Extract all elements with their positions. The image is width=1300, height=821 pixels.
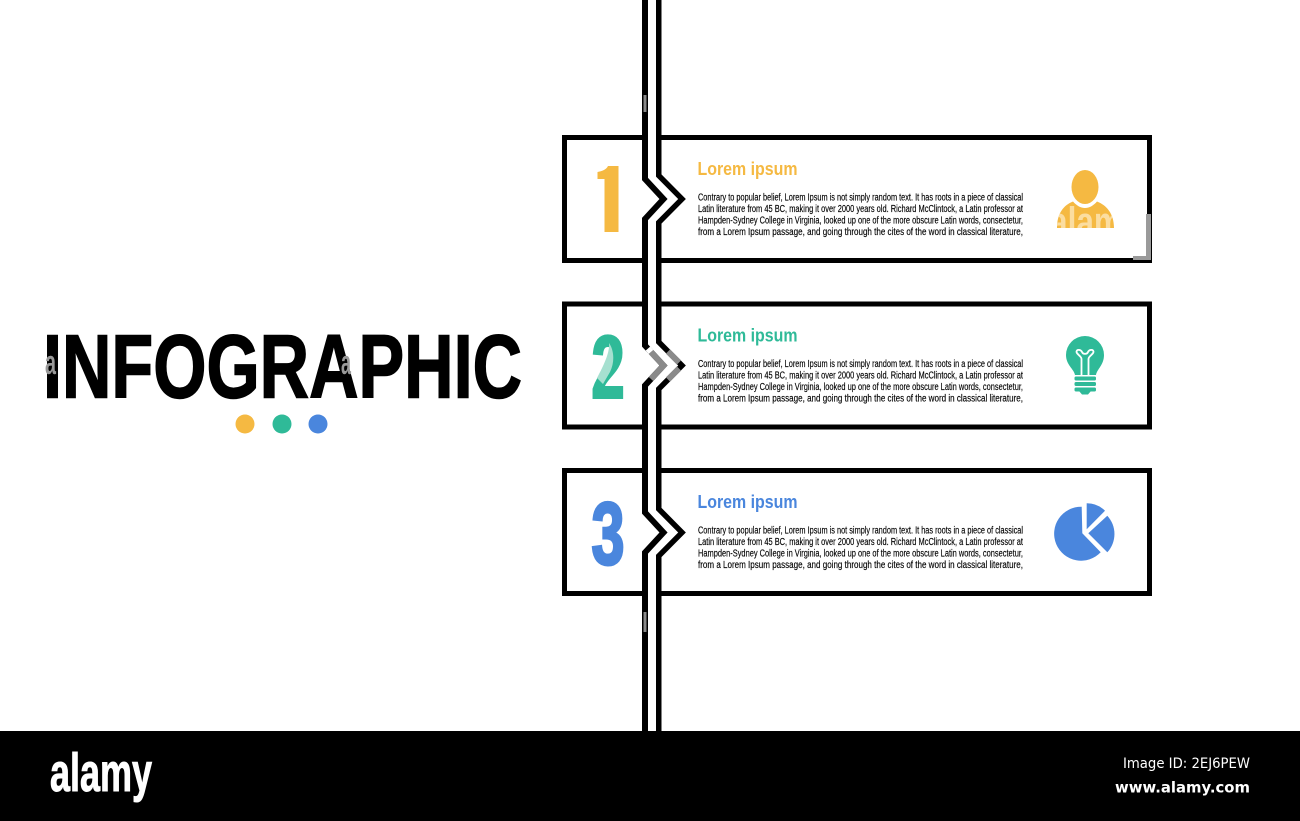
timeline double line with chevrons — [645, 0, 682, 731]
watermark overlay on middle chevron — [645, 95, 679, 632]
body text 1: Contrary to popular belief, Lorem Ipsum is not simply random text. It has roots in a piece of classical — [698, 192, 1023, 204]
icon: pie chart — [1054, 503, 1114, 561]
body text 3: Contrary to popular belief, Lorem Ipsum is not simply random text. It has roots in a piece of classical — [698, 526, 1023, 536]
body text 2: Latin literature from 45 BC, making it over 2000 years old. Richard McClintock, a Latin professor at — [698, 370, 1023, 382]
icon: person — [1057, 170, 1114, 228]
body text 2 — [698, 359, 1023, 404]
body text 3: Latin literature from 45 BC, making it over 2000 years old. Richard McClintock, a Latin professor at — [698, 537, 1023, 548]
colour dots — [236, 414, 328, 434]
body text 2: from a Lorem Ipsum passage, and going through the cites of the word in classical literature, — [698, 394, 1023, 404]
image id: Image ID: 2EJ6PEW — [1123, 756, 1250, 772]
panel 3 — [564, 470, 1150, 594]
heading 3: Lorem ipsum — [698, 492, 798, 512]
heading 1: Lorem ipsum — [698, 159, 798, 179]
watermark fragments on title: a — [341, 344, 352, 382]
number 1: 1 — [585, 156, 631, 258]
body text 3 — [698, 526, 1023, 571]
body text 3: Hampden-Sydney College in Virginia, looked up one of the more obscure Latin words, consectetur, — [698, 548, 1023, 560]
title: INFOGRAPHIC — [43, 317, 522, 417]
icon: person: alam — [1050, 200, 1122, 244]
body text 2: Hampden-Sydney College in Virginia, looked up one of the more obscure Latin words, consectetur, — [698, 382, 1023, 393]
body text 2: Contrary to popular belief, Lorem Ipsum is not simply random text. It has roots in a piece of classical — [698, 359, 1023, 370]
footer bar — [0, 731, 1300, 821]
body text 1: Hampden-Sydney College in Virginia, looked up one of the more obscure Latin words, consectetur, — [698, 216, 1023, 226]
body text 3: from a Lorem Ipsum passage, and going through the cites of the word in classical literature, — [698, 560, 1023, 571]
watermark fragment at panel corner — [1133, 214, 1151, 260]
panel 2 — [564, 304, 1150, 427]
website: www.alamy.com — [1115, 778, 1250, 796]
heading 2: Lorem ipsum — [698, 326, 798, 346]
body text 1: Latin literature from 45 BC, making it over 2000 years old. Richard McClintock, a Latin professor at — [698, 204, 1023, 215]
watermark fragments on title — [45, 344, 352, 382]
body text 1 — [698, 192, 1023, 238]
logo: alamy: alamy — [50, 743, 152, 803]
icon: light bulb — [1066, 336, 1104, 394]
number 2: 2 — [592, 318, 624, 416]
panel 1 — [564, 138, 1151, 260]
watermark fragments on title: a — [45, 344, 57, 382]
number 2 — [592, 318, 624, 416]
body text 1: from a Lorem Ipsum passage, and going through the cites of the word in classical literature, — [698, 227, 1023, 238]
number 3: 3 — [592, 484, 624, 583]
